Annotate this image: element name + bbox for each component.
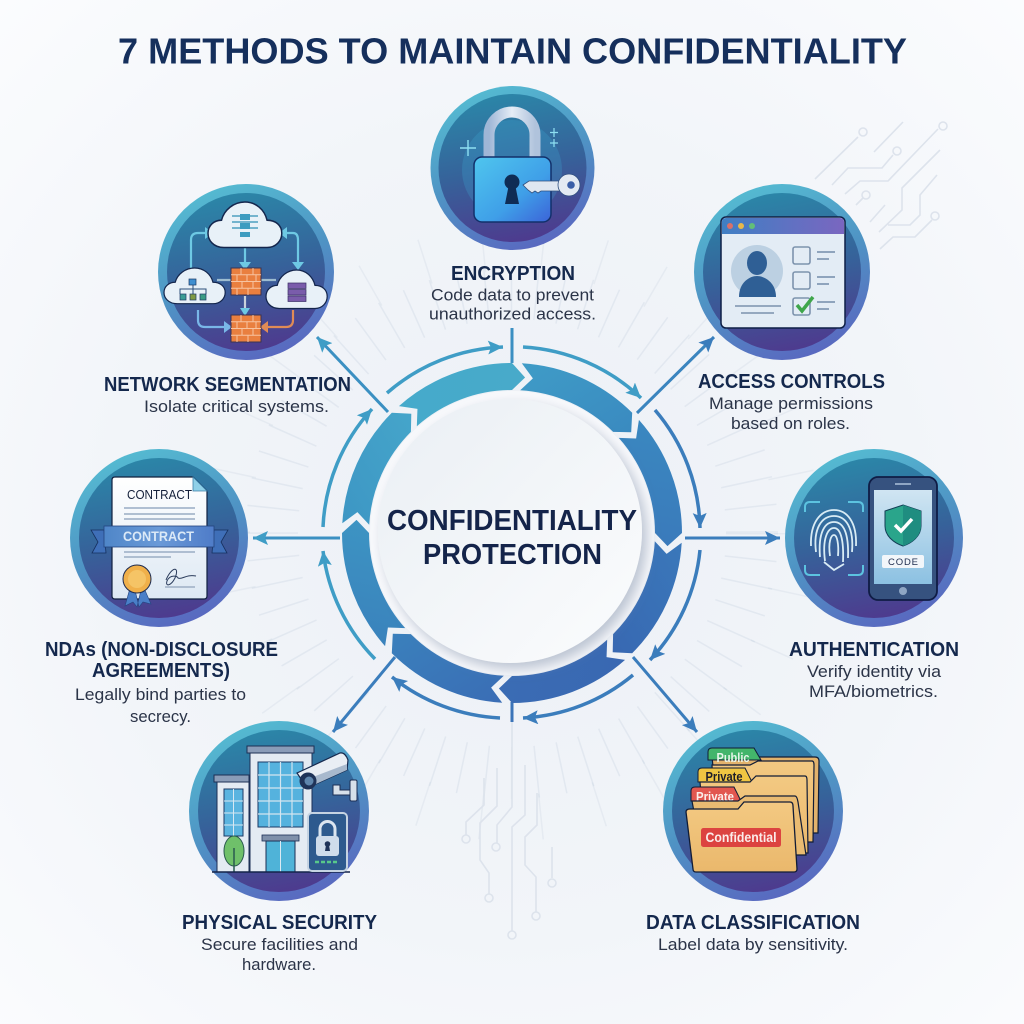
label: access controls: based on roles. bbox=[731, 414, 850, 433]
icon: physical security bbox=[189, 721, 369, 901]
icon: authentication bbox=[785, 449, 963, 627]
label: encryption bbox=[429, 263, 596, 324]
label: physical security: Secure facilities and bbox=[201, 935, 358, 954]
icon: data classification folders bbox=[663, 721, 843, 901]
icon: data classification folders: Private bbox=[706, 770, 743, 784]
label: data classification: DATA CLASSIFICATION bbox=[646, 912, 860, 934]
icon: encryption padlock and key bbox=[430, 86, 594, 250]
icon: data classification folders: Confidential bbox=[706, 830, 776, 845]
label: NDAs bbox=[45, 639, 278, 726]
icon: access controls window bbox=[694, 184, 870, 360]
outer circular flow arrows bbox=[323, 347, 700, 718]
icon: data classification folders: Private bbox=[696, 790, 734, 804]
central hub: CONFIDENTIALITY bbox=[387, 505, 637, 537]
label: data classification bbox=[646, 912, 860, 954]
label: NDAs: NDAs (NON-DISCLOSURE bbox=[45, 639, 278, 661]
label: network segmentation: Isolate critical systems. bbox=[144, 397, 329, 416]
segmented chevron ring bbox=[307, 328, 717, 738]
label: authentication: MFA/biometrics. bbox=[809, 682, 938, 701]
central hub: PROTECTION bbox=[423, 539, 602, 571]
label: access controls bbox=[698, 371, 885, 433]
label: physical security: hardware. bbox=[242, 955, 316, 974]
title: 7 METHODS TO MAINTAIN CONFIDENTIALITY bbox=[118, 30, 907, 72]
label: physical security bbox=[182, 912, 378, 974]
label: NDAs: AGREEMENTS) bbox=[92, 660, 230, 682]
label: physical security: PHYSICAL SECURITY bbox=[182, 912, 378, 934]
spoke arrows from hub to methods bbox=[253, 328, 780, 732]
label: data classification: Label data by sensitivity. bbox=[658, 935, 848, 954]
label: encryption: ENCRYPTION bbox=[451, 263, 575, 285]
label: NDAs: Legally bind parties to bbox=[75, 685, 246, 704]
central hub bbox=[370, 391, 654, 675]
label: encryption: unauthorized access. bbox=[429, 304, 596, 324]
label: authentication: Verify identity via bbox=[807, 662, 942, 681]
label: access controls: Manage permissions bbox=[709, 394, 873, 413]
label: authentication bbox=[789, 639, 959, 701]
icon: NDA contract: CONTRACT bbox=[123, 528, 194, 544]
label: network segmentation bbox=[104, 374, 351, 416]
icon: network segmentation bbox=[158, 184, 334, 360]
icon: authentication: CODE bbox=[888, 557, 918, 568]
label: encryption: Code data to prevent bbox=[431, 286, 594, 304]
label: network segmentation: NETWORK SEGMENTATION bbox=[104, 374, 351, 396]
label: authentication: AUTHENTICATION bbox=[789, 639, 959, 661]
icon: NDA contract bbox=[70, 449, 248, 627]
label: access controls: ACCESS CONTROLS bbox=[698, 371, 885, 393]
icon: NDA contract: CONTRACT bbox=[127, 487, 192, 502]
icon: data classification folders: Public bbox=[716, 751, 750, 765]
label: NDAs: secrecy. bbox=[130, 707, 191, 726]
